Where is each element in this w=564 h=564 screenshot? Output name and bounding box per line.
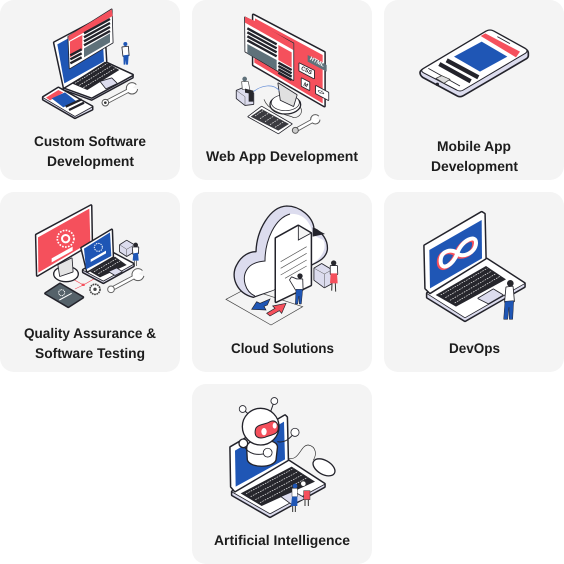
heading: Quality Assurance and Software Testing: Quality Assurance & bbox=[24, 325, 156, 341]
heading: Cloud Solutions: Cloud Solutions bbox=[231, 340, 334, 356]
heading: Quality Assurance and Software Testing: Software Testing bbox=[35, 345, 145, 361]
icon: monitor with code window: </> bbox=[316, 88, 325, 97]
panel: Mobile App Development bbox=[384, 0, 564, 180]
heading: Custom Software Development: Development bbox=[47, 153, 134, 169]
icon: laptop with infinity loop bbox=[425, 212, 524, 321]
heading: Custom Software Development bbox=[34, 133, 146, 169]
panel: Web App Development bbox=[192, 0, 372, 180]
panel: Cloud Solutions bbox=[192, 192, 372, 372]
heading: Web App Development: Web App Development bbox=[206, 148, 358, 164]
panel: Custom Software Development bbox=[0, 0, 180, 180]
icon: monitor with code window bbox=[237, 15, 328, 133]
icon: cloud with document and arrows bbox=[226, 206, 338, 325]
icon: monitor, laptop and phone with gears bbox=[36, 206, 148, 307]
heading: Mobile App Development: Development bbox=[431, 158, 518, 174]
heading: Mobile App Development bbox=[431, 138, 518, 174]
heading: Mobile App Development: Mobile App bbox=[437, 138, 511, 154]
icon: robot emerging from laptop bbox=[231, 398, 338, 517]
icon: monitor with code window: HTML bbox=[308, 56, 326, 69]
heading: Artificial Intelligence: Artificial Intelligence bbox=[214, 532, 350, 548]
heading: Quality Assurance and Software Testing bbox=[24, 325, 156, 361]
icon: monitor with code window: CSS bbox=[300, 66, 313, 76]
panel: Artificial Intelligence bbox=[192, 384, 372, 564]
heading: Custom Software Development: Custom Software bbox=[34, 133, 146, 149]
icon: smartphone bbox=[420, 30, 528, 97]
panel: Quality Assurance and Software Testing bbox=[0, 192, 180, 372]
heading: DevOps: DevOps bbox=[449, 340, 500, 356]
icon: laptop, phone and wrench bbox=[43, 9, 143, 118]
icon: monitor with code window: M bbox=[302, 82, 309, 89]
panel: DevOps bbox=[384, 192, 564, 372]
